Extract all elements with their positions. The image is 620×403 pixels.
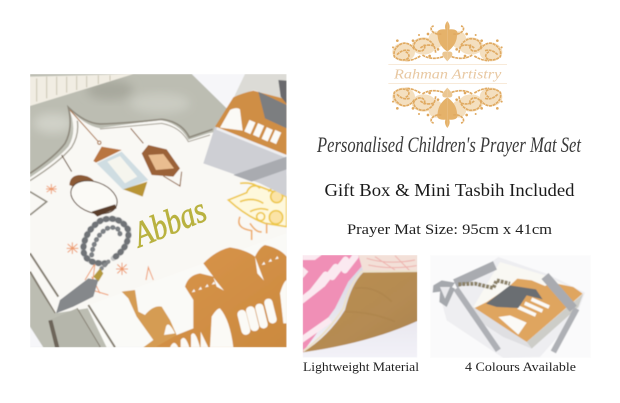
tassel <box>486 285 543 308</box>
logo rule bottom <box>388 82 507 85</box>
photo: gift box with tasbih <box>430 255 591 358</box>
box top <box>474 262 561 307</box>
orange mosque <box>143 245 287 347</box>
ribbon <box>455 265 573 309</box>
clear wrap <box>442 257 585 358</box>
photo: lightweight material <box>297 252 417 358</box>
centre lantern <box>70 110 148 197</box>
arch border <box>30 107 213 215</box>
gift box in background <box>203 74 287 197</box>
rolled mat <box>87 233 287 347</box>
main photo: prayer mat <box>30 74 287 347</box>
caption: colours: 4 Colours Available <box>465 359 576 374</box>
caption: lightweight material: Lightweight Material <box>303 359 419 374</box>
tasbih beads <box>83 219 128 270</box>
lower-left mat border <box>30 253 58 313</box>
right lantern <box>131 128 182 186</box>
top ornament <box>392 21 503 61</box>
white mat arch panel <box>30 107 287 313</box>
logo name: Rahman Artistry <box>393 68 502 83</box>
left lantern <box>62 155 122 220</box>
fringe <box>30 74 133 106</box>
grey mat backing <box>30 74 227 348</box>
yellow mandala <box>228 183 287 227</box>
bottom ornament <box>392 88 503 128</box>
logo rule top <box>388 63 507 66</box>
size line: Prayer Mat Size: 95cm x 41cm <box>347 222 553 238</box>
subtitle: gift box: Gift Box & Mini Tasbih Included <box>324 180 574 200</box>
orange star marks <box>46 184 153 295</box>
name text: Abbas <box>126 190 212 255</box>
logo: Rahman Artistry <box>388 21 507 128</box>
beads <box>458 280 510 288</box>
tassel <box>56 268 103 313</box>
